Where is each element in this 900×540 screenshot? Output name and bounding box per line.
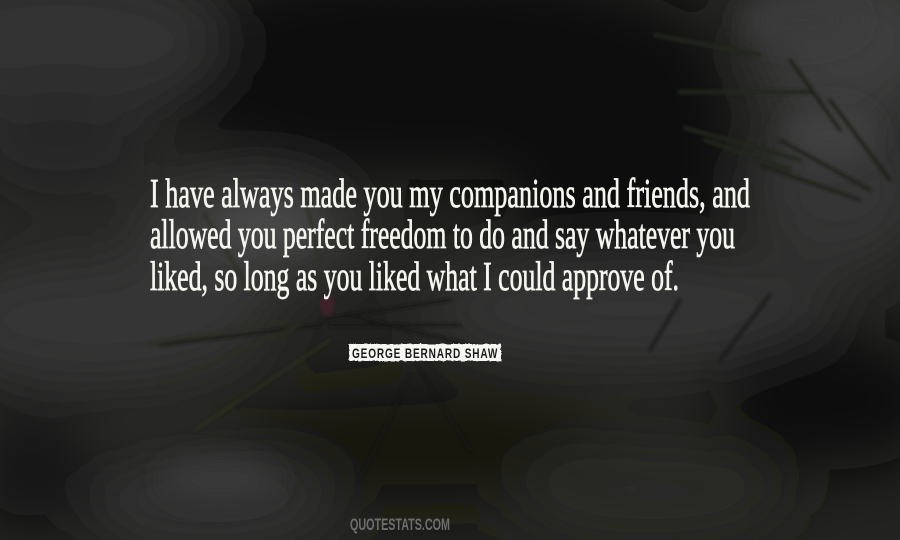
- pine needles: [150, 35, 890, 480]
- author label: GEORGE BERNARD SHAW: [352, 345, 498, 361]
- quote text: [150, 170, 750, 299]
- watermark: QUOTESTATS.COM: [350, 515, 450, 534]
